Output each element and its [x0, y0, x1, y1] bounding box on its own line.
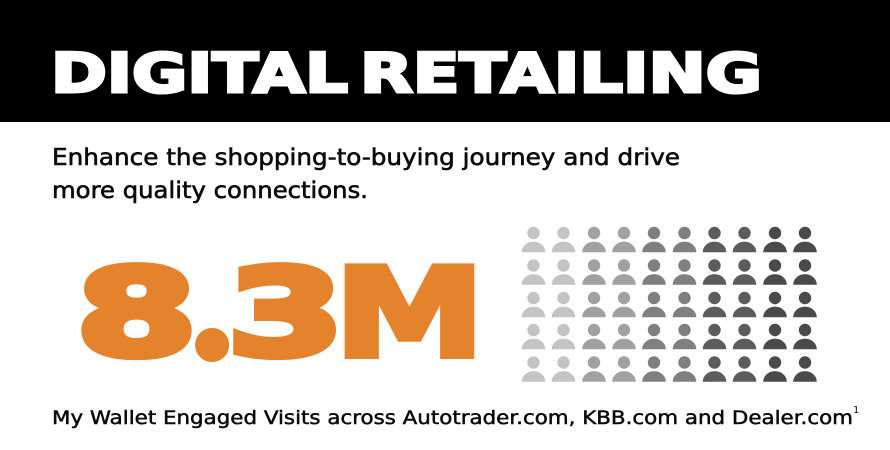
big number: 8.3M: 3: [228, 246, 344, 384]
subtitle text: more quality connections.: [52, 178, 368, 204]
big number: 8.3M: .: [189, 193, 235, 398]
title: [51, 42, 762, 105]
title: DIGITAL: [51, 42, 348, 105]
header band: [0, 0, 890, 122]
subtitle text: Enhance the shopping-to-buying journey and drive: [52, 145, 680, 171]
title: RETAILING: [360, 42, 762, 105]
big number: 8.3M: M: [334, 243, 484, 386]
subtitle text: [52, 145, 680, 204]
caption: 1: [853, 405, 859, 416]
caption: My Wallet Engaged Visits across Autotrader.com, KBB.com and Dealer.com: [52, 407, 853, 429]
big number: 8.3M: [77, 193, 484, 398]
big number: 8.3M: 8: [77, 246, 197, 384]
icon array: people: [522, 227, 817, 382]
